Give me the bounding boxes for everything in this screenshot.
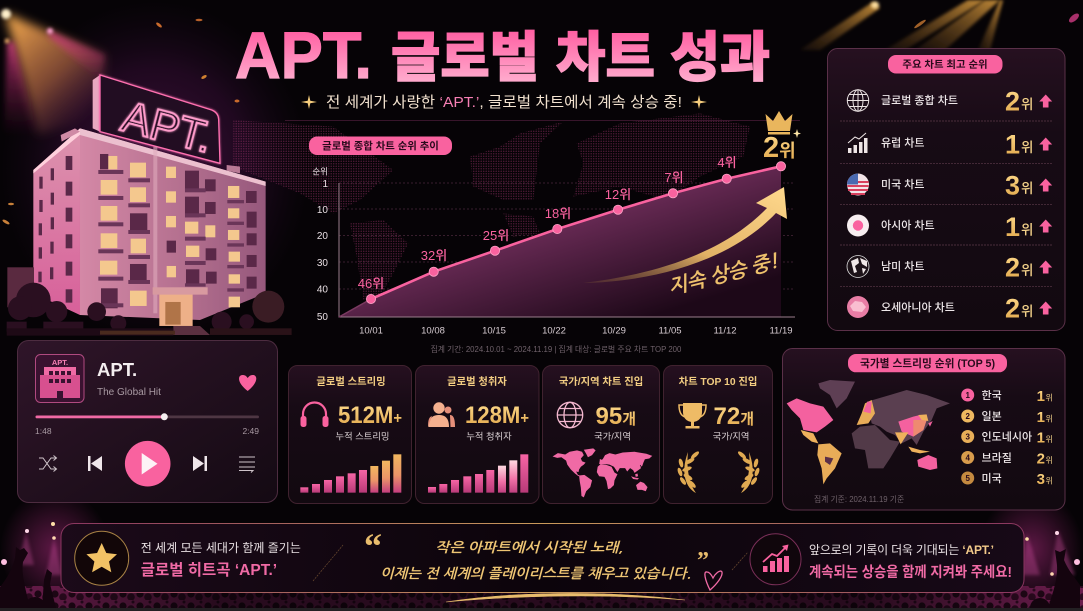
- stat card: global listeners: 128M+: [465, 402, 529, 429]
- mini bar chart: [300, 454, 401, 493]
- right message: 앞으로의 기록이 더욱 기대되는 ‘APT.’: [809, 543, 994, 557]
- icon: hand drawn heart: [705, 571, 722, 590]
- quote: 이제는 전 세계의 플레이리스트를 채우고 있습니다.: [380, 566, 691, 581]
- rank labels: 4위: [717, 155, 737, 170]
- ranking list: 1: [1037, 430, 1045, 446]
- rank labels: [358, 155, 737, 291]
- gold swoosh: [446, 593, 685, 602]
- entrance: [153, 287, 210, 335]
- rank labels: 32위: [421, 248, 447, 263]
- stat card: global streams: [288, 366, 412, 504]
- ranking list: 1: [1037, 409, 1045, 426]
- stat card: global listeners: 글로벌 청취자: [447, 375, 507, 388]
- icon: Japan-style flag: [847, 214, 869, 236]
- play button: [125, 441, 170, 487]
- y axis: 20: [317, 231, 328, 242]
- stat card: global listeners: [416, 366, 539, 504]
- ranking list: 5: [965, 474, 970, 483]
- panel: best chart positions: 위: [1021, 181, 1033, 196]
- subtitle: 전 세계가 사랑한 ‘APT.’, 글로벌 차트에서 계속 상승 중!: [326, 94, 682, 111]
- ranking list: 2: [1037, 450, 1045, 468]
- crown and final rank: 2위: [763, 132, 796, 164]
- data note: 집계 기간: 2024.10.01 ~ 2024.11.19 | 집계 대상: 글로벌 주요 차트 TOP 200: [431, 344, 682, 354]
- neon sign reading APT.: APT.: [117, 93, 217, 163]
- ranking list: 미국: [982, 472, 1002, 485]
- ranking list: 4: [965, 454, 970, 462]
- illustration: neon apartment building: [7, 75, 292, 336]
- panel heading pill: [888, 55, 1002, 74]
- x axis dates: 11/19: [769, 326, 793, 336]
- rank labels: 7위: [664, 170, 684, 185]
- crown and final rank: [763, 111, 801, 164]
- panel heading pill: 국가별 스트리밍 순위 (TOP 5): [860, 357, 995, 370]
- ranking list: 1: [965, 391, 970, 400]
- stat card: countries entered: [542, 366, 660, 504]
- quote: “: [364, 526, 382, 566]
- panel heading pill: 주요 차트 최고 순위: [902, 58, 988, 71]
- ranking list: 브라질: [982, 452, 1012, 464]
- title: 차트: [556, 28, 655, 88]
- icon: shuffle: [39, 456, 56, 472]
- time stamps: 1:48: [35, 426, 52, 436]
- ranking list: 1: [1037, 388, 1045, 405]
- quote: 작은 아파트에서 시작된 노래,: [435, 540, 623, 555]
- panel: best chart positions: 위: [1021, 140, 1033, 155]
- ranking list: 위: [1046, 435, 1053, 444]
- rising note: 지속 상승 중!: [666, 250, 781, 297]
- x axis dates: 10/22: [542, 326, 566, 336]
- icon: gold star badge: [75, 531, 129, 585]
- row labels: [881, 93, 958, 314]
- rank labels: 25위: [483, 228, 509, 243]
- rising line with markers: [339, 162, 786, 317]
- chart heading pill: [309, 136, 452, 155]
- panel heading pill: [848, 354, 1007, 372]
- row labels: 미국 차트: [881, 178, 925, 191]
- rank numbers: 2: [1005, 294, 1020, 324]
- icon: laurel wreaths: [677, 450, 760, 493]
- title: 글로벌: [391, 28, 539, 88]
- track subtitle: The Global Hit: [97, 387, 161, 398]
- ranking list: 3: [965, 432, 970, 442]
- up arrows: [1039, 94, 1052, 314]
- row labels: 오세아니아 차트: [881, 301, 955, 314]
- stat card: top 10 entries: [664, 366, 772, 504]
- icon: trophy: [679, 403, 706, 428]
- icon: US flag: [847, 174, 869, 196]
- y axis: 40: [317, 284, 328, 296]
- panel: music player: [18, 340, 278, 502]
- y axis: 50: [317, 312, 328, 323]
- rank numbers: 1: [1005, 130, 1020, 160]
- ranking list: 2: [965, 412, 970, 421]
- ranking list: 위: [1046, 414, 1053, 424]
- y axis: 1: [322, 179, 328, 190]
- rank numbers: 2: [1005, 252, 1020, 282]
- left message: 전 세계 모든 세대가 함께 즐기는: [141, 541, 301, 555]
- row labels: 유럽 차트: [881, 136, 925, 150]
- quote: ”: [697, 548, 709, 574]
- x axis dates: 10/08: [421, 326, 445, 336]
- stat card: top 10 entries: 72개: [714, 403, 754, 430]
- data note: 집계 기준: 2024.11.19 기준: [814, 494, 904, 504]
- row labels: 아시아 차트: [881, 219, 935, 232]
- icon: next: [193, 456, 207, 471]
- row labels: 남미 차트: [881, 260, 925, 273]
- stat card: global listeners: 누적 청취자: [466, 430, 512, 442]
- icon: previous: [88, 456, 102, 471]
- rank numbers: 3: [1005, 170, 1020, 200]
- icon: growth chart: [848, 133, 868, 153]
- y axis: 30: [317, 258, 328, 269]
- panel: best chart positions: 위: [1021, 263, 1033, 278]
- album art: [36, 354, 84, 402]
- title: APT.: [235, 18, 372, 92]
- right message: [809, 543, 1012, 581]
- title: [235, 18, 770, 92]
- stat card: countries entered: 국가/지역: [594, 432, 631, 442]
- time stamps: 2:49: [242, 426, 259, 436]
- album art: APT.: [52, 358, 68, 367]
- ranking list: 한국: [982, 389, 1002, 402]
- rank numbers: 2: [1005, 86, 1020, 116]
- ranking list: 3: [1037, 471, 1045, 488]
- y axis: 10: [317, 205, 328, 216]
- icon: headphones: [300, 402, 328, 427]
- x axis dates: 11/12: [713, 326, 737, 336]
- progress bar: [36, 413, 259, 420]
- panel: best chart positions: [828, 48, 1065, 330]
- rank labels: 18위: [545, 206, 571, 221]
- x axis dates: 10/29: [602, 326, 626, 336]
- stat card: top 10 entries: 차트 TOP 10 진입: [679, 375, 757, 388]
- rank numbers: 1: [1005, 212, 1020, 242]
- panel: best chart positions: 위: [1021, 97, 1033, 112]
- mini world map: [553, 448, 652, 497]
- ranking list: [961, 388, 1053, 488]
- icon: Oceania: [847, 296, 869, 318]
- quote: [364, 526, 709, 581]
- icon: globe: [557, 402, 583, 428]
- panel: best chart positions: 위: [1021, 222, 1033, 238]
- rank numbers: [1005, 86, 1020, 324]
- ranking list: 일본: [982, 409, 1002, 423]
- x axis dates: 10/01: [359, 326, 383, 336]
- chart heading pill: 글로벌 종합 차트 순위 추이: [322, 140, 439, 152]
- icon: queue: [239, 457, 255, 472]
- x axis dates: 11/05: [658, 326, 682, 336]
- ranking list: 위: [1046, 476, 1053, 486]
- ranking list: 위: [1046, 394, 1053, 402]
- icon: globe: [847, 90, 869, 111]
- rank labels: 46위: [358, 276, 384, 291]
- stat card: global streams: 512M+: [338, 402, 402, 429]
- icon: people: [428, 402, 455, 427]
- icon: growth chart badge: [750, 534, 801, 585]
- rank labels: 12위: [605, 187, 631, 202]
- banner: closing message: [61, 524, 1024, 602]
- icon: heart: [239, 375, 256, 391]
- stat card: global streams: 글로벌 스트리밍: [316, 375, 386, 388]
- x axis dates: [359, 326, 793, 336]
- stat card: countries entered: 국가/지역 차트 진입: [559, 375, 643, 388]
- y axis: 순위: [312, 166, 328, 176]
- right message: 계속되는 상승을 함께 지켜봐 주세요!: [809, 564, 1012, 581]
- time stamps: [35, 426, 259, 436]
- stat card: top 10 entries: 국가/지역: [713, 432, 749, 442]
- mini bar chart: [428, 454, 528, 493]
- stat card: global streams: 누적 스트리밍: [336, 430, 389, 442]
- panel: best chart positions: 위: [1021, 304, 1033, 319]
- ranking list: 인도네시아: [982, 430, 1032, 444]
- icon: earth: [847, 256, 869, 278]
- left message: 글로벌 히트곡 ‘APT.’: [141, 561, 277, 579]
- row labels: 글로벌 종합 차트: [881, 93, 958, 107]
- track title: APT.: [97, 359, 137, 380]
- x axis dates: 10/15: [482, 326, 506, 336]
- panel: rank trend line chart: [309, 111, 801, 354]
- area under the line: [339, 166, 781, 317]
- choropleth world map: [787, 380, 950, 484]
- gold rising arrow: [583, 187, 787, 283]
- y axis: [312, 166, 328, 323]
- stat card: countries entered: 95개: [596, 403, 636, 430]
- ranking list: 위: [1046, 456, 1053, 465]
- title: 성과: [670, 28, 770, 88]
- left message: [141, 541, 301, 579]
- dotted world map backdrop: [233, 113, 750, 303]
- panel: top 5 countries: [782, 348, 1065, 510]
- neon sign reading APT.: [93, 75, 220, 163]
